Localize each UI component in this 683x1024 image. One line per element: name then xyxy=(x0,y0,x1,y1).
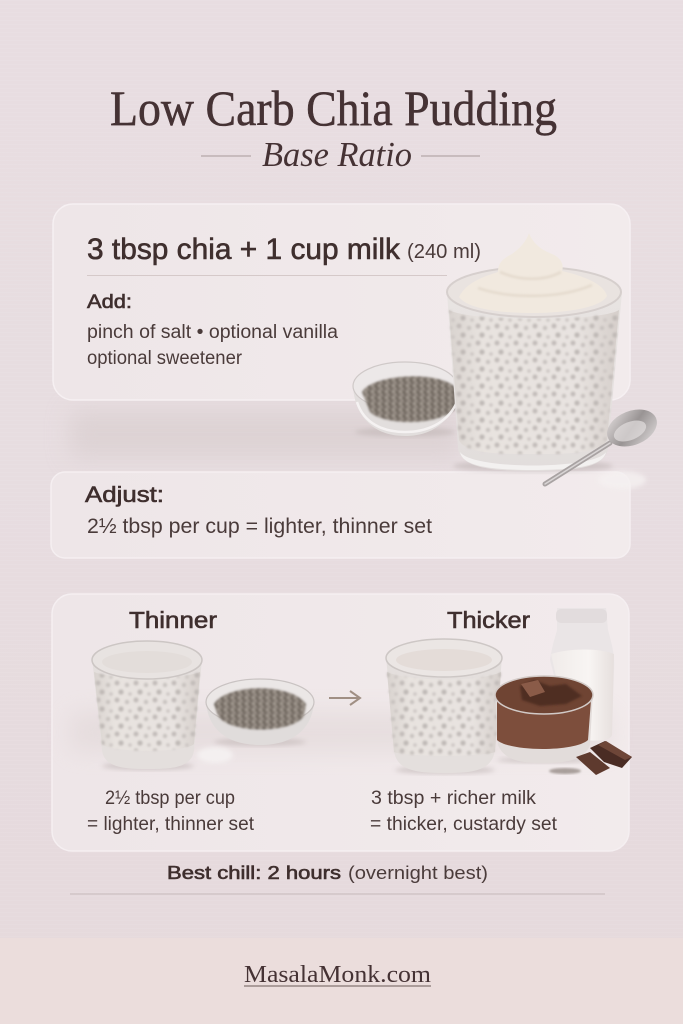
adjust detail: 2½ tbsp per cup = lighter, thinner set xyxy=(87,515,432,538)
arrow xyxy=(329,691,360,705)
chill time note: Best chill: 2 hours xyxy=(167,863,341,883)
salt pile xyxy=(197,747,233,763)
thicker caption xyxy=(370,788,558,835)
shadow band below the first card xyxy=(70,410,460,458)
thinner caption xyxy=(87,788,255,835)
photo: bowl of chia seeds xyxy=(353,362,458,437)
base ratio heading: 3 tbsp chia + 1 cup milk xyxy=(87,233,401,266)
photo: thinner glass xyxy=(92,641,202,770)
chill time note: (overnight best) xyxy=(348,863,488,883)
panel: thinner and thicker comparison xyxy=(52,594,632,851)
add ingredients xyxy=(87,322,338,369)
photo: spoon xyxy=(545,402,662,484)
photo: thinner bowl of chia xyxy=(206,679,314,746)
thicker caption: 3 tbsp + richer milk xyxy=(371,788,537,809)
chill time note xyxy=(70,863,605,894)
photo: chocolate pieces xyxy=(549,741,632,775)
photo: chocolate pudding bowl xyxy=(495,676,593,763)
contact shadow xyxy=(70,712,610,752)
thinner caption: 2½ tbsp per cup xyxy=(105,788,235,809)
adjust label: Adjust: xyxy=(85,482,164,507)
add ingredients: pinch of salt • optional vanilla xyxy=(87,322,338,343)
photo: milk bottle xyxy=(550,608,614,741)
thinner heading: Thinner xyxy=(129,607,217,633)
title: Low Carb Chia Pudding xyxy=(110,80,557,136)
subtitle: Base Ratio: Base Ratio xyxy=(262,135,412,174)
add ingredients: optional sweetener xyxy=(87,348,243,369)
thicker heading: Thicker xyxy=(447,607,530,633)
thicker caption: = thicker, custardy set xyxy=(370,814,558,835)
base ratio volume: (240 ml) xyxy=(407,241,481,263)
cream swirl xyxy=(459,233,607,313)
footer brand: MasalaMonk.com xyxy=(244,962,431,988)
footer band xyxy=(0,938,683,1024)
thinner caption: = lighter, thinner set xyxy=(87,814,255,835)
photo: main chia pudding glass xyxy=(447,233,622,472)
panel: adjust xyxy=(51,472,630,558)
photo: thicker glass xyxy=(386,639,502,774)
panel: base ratio xyxy=(53,204,630,400)
salt sprinkle xyxy=(598,471,646,489)
add label: Add: xyxy=(87,292,132,313)
